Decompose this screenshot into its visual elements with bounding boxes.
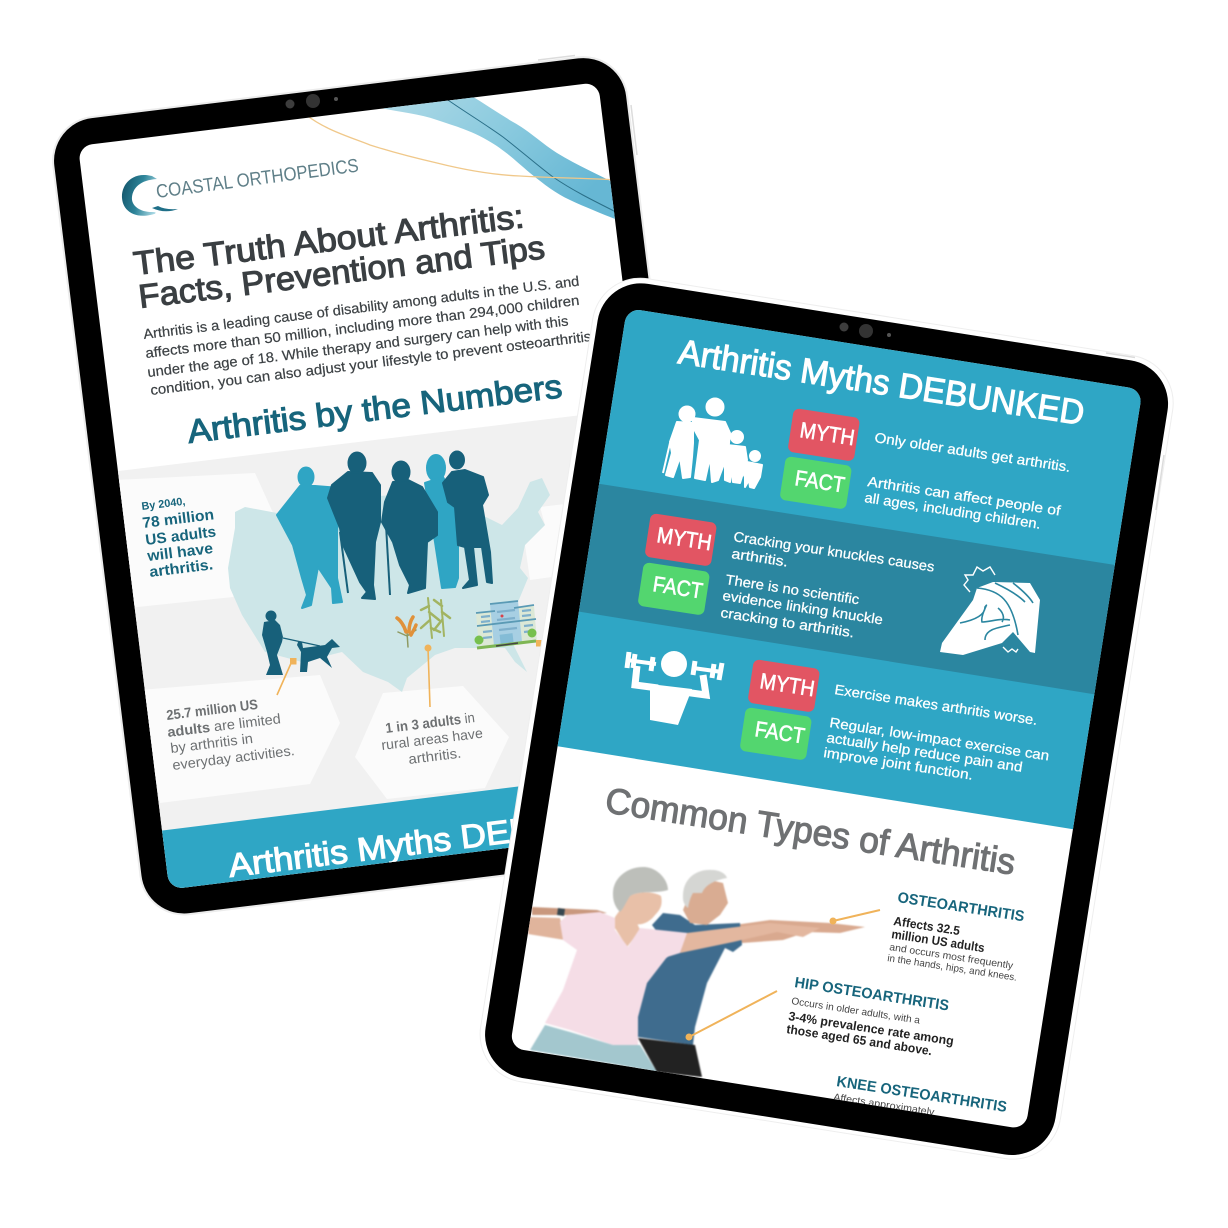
type: hip osteoarthritis: those aged 65 and above. (786, 1022, 933, 1058)
myth row 1: MYTH (798, 417, 856, 450)
title (132, 206, 545, 308)
type: hip osteoarthritis: 3-4% prevalence rate among (788, 1009, 955, 1048)
stat: 78 million: will have (145, 540, 214, 565)
myth row 2: Cracking your knuckles causes (733, 528, 936, 575)
screen: right (512, 310, 1141, 1128)
tablet body: right (479, 277, 1174, 1161)
myth row 2 (637, 513, 936, 640)
heading: common types: Common Types of Arthritis (603, 779, 1018, 883)
tablet body: left (48, 52, 720, 920)
stat: 1 in 3 adults: arthritis. (407, 745, 462, 767)
icon: hospital (474, 601, 537, 648)
myth row 2: There is no scientific (725, 571, 860, 607)
orange callout pointers (277, 640, 542, 707)
stat: 1 in 3 adults: rural areas have (380, 725, 484, 753)
intro paragraph: Arthritis is a leading cause of disability among adults in the U.S. and (142, 273, 580, 342)
stat: 25.7 million (166, 700, 294, 770)
myth row 3: MYTH (758, 668, 816, 701)
title: The Truth About Arthritis: (131, 197, 526, 282)
type: osteoarthritis: in the hands, hips, and knees. (887, 953, 1018, 984)
intro paragraph: affects more than 50 million, including more than 294,000 children (144, 292, 580, 361)
stat: 25.7 million: by arthritis in (169, 730, 254, 756)
icon: dog walker (262, 610, 340, 675)
stat: 25.7 million: adults are limited (166, 710, 282, 740)
screen background (512, 310, 1141, 1128)
silhouettes: five people (277, 452, 492, 608)
stat: 78 million (141, 496, 217, 581)
type: osteoarthritis (887, 889, 1025, 984)
icon: crops (397, 598, 450, 647)
panel: myths blue (558, 310, 1141, 830)
stat: 78 million: 78 million (141, 506, 215, 532)
stat: 1 in 3 adults: 1 in 3 adults in (384, 709, 476, 736)
heading: myths debunked: Arthritis Myths DEBUNKED (676, 332, 1087, 433)
myth row 3: actually help reduce pain and (826, 729, 1024, 775)
side buttons: right (1106, 353, 1164, 510)
icon: cracking knuckles (940, 567, 1040, 655)
stat: 78 million: By 2040, (141, 496, 186, 513)
myth row 1 (779, 408, 1072, 532)
intro paragraph: under the age of 18. While therapy and surgery can help with this (146, 312, 569, 380)
camera: left (286, 94, 338, 108)
myth row 3: Regular, low-impact exercise can (829, 714, 1050, 764)
type: osteoarthritis: OSTEOARTHRITIS (896, 889, 1025, 925)
stat: 25.7 million: everyday activities. (171, 742, 295, 773)
type: hip osteoarthritis: Occurs in older adults, with a (791, 996, 921, 1027)
intro paragraph (142, 273, 592, 398)
intro paragraph: condition, you can also adjust your lifestyle to prevent osteoarthritis (149, 328, 592, 398)
title: Facts, Prevention and Tips (136, 228, 547, 315)
tablet halo (473, 271, 1180, 1166)
callout pointers (686, 910, 880, 1040)
tablet: right device (473, 271, 1180, 1166)
myth row 1: all ages, including children. (864, 489, 1042, 532)
heading: arthritis by the numbers: Arthritis by the Numbers (185, 367, 564, 450)
heading: myths teaser: Arthritis Myths DEBUNKED (226, 795, 658, 884)
band: dark myth row (579, 484, 1115, 694)
type: osteoarthritis: million US adults (891, 927, 986, 955)
stat: 78 million: US adults (144, 523, 217, 549)
header swoosh (305, 95, 620, 221)
myth row 2: arthritis. (731, 545, 789, 570)
stat: 1 in 3 adults (382, 712, 482, 764)
type: knee osteoarthritis: KNEE OSTEOARTHRITIS (835, 1073, 1008, 1116)
tablet: left device (52, 54, 650, 916)
icon: dumbbell exerciser (627, 651, 722, 725)
side buttons: left (538, 56, 637, 155)
camera: right (840, 322, 891, 338)
type: knee osteoarthritis: Affects approximately (833, 1092, 935, 1118)
logo: COASTAL ORTHOPEDICS (155, 156, 360, 203)
screen background (80, 84, 622, 888)
panel: numbers background (118, 416, 577, 888)
myth row 1: FACT (793, 465, 846, 498)
myth row 3: improve joint function. (823, 744, 974, 783)
stat: 78 million: arthritis. (148, 556, 214, 581)
icon: family (663, 398, 762, 488)
logo (122, 156, 360, 216)
myth row 2: MYTH (655, 522, 713, 555)
type: osteoarthritis: and occurs most frequently (889, 942, 1014, 972)
myth row 2: cracking to arthritis. (720, 604, 855, 640)
US map (228, 478, 550, 692)
myth row 1: Only older adults get arthritis. (874, 429, 1072, 475)
type: hip osteoarthritis: HIP OSTEOARTHRITIS (793, 974, 950, 1015)
photo: couple exercising (528, 867, 865, 1077)
screen: left (80, 84, 622, 888)
type: osteoarthritis: Affects 32.5 (893, 914, 961, 938)
type: hip osteoarthritis (786, 974, 955, 1058)
myth row 3 (739, 659, 1050, 783)
myth row 2: evidence linking knuckle (722, 587, 884, 628)
myth row 1: Arthritis can affect people of (867, 473, 1062, 518)
myth row 3: FACT (753, 716, 806, 749)
stat: 25.7 million: 25.7 million US (165, 696, 259, 723)
myth row 2: FACT (651, 571, 704, 604)
panel: myths teaser (162, 786, 518, 888)
stat hexagons (119, 473, 562, 803)
myth row 3: Exercise makes arthritis worse. (834, 681, 1039, 728)
